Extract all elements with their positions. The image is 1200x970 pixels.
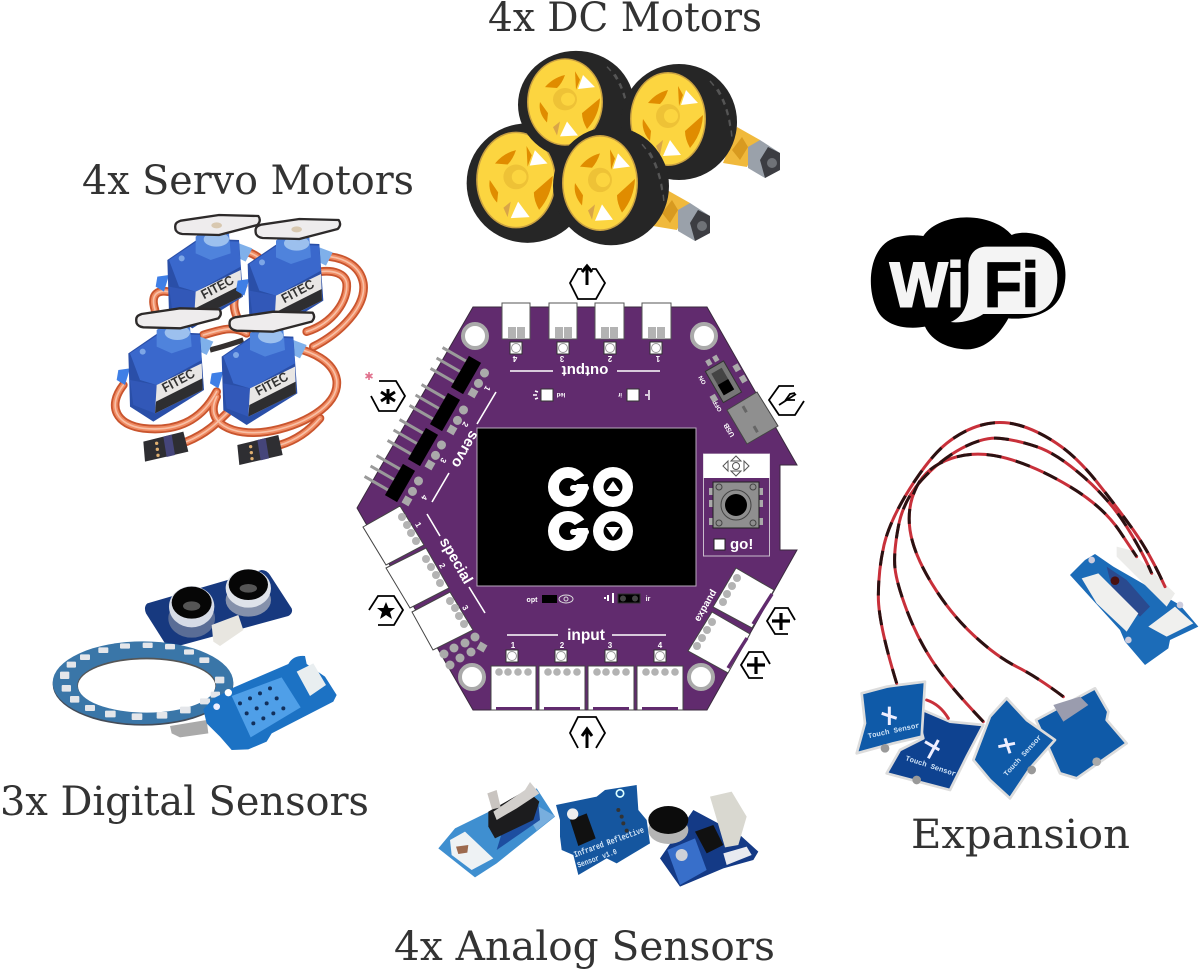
ultrasonic sensor (145, 569, 292, 647)
touch board 2 (887, 707, 983, 790)
wheel: front left (467, 123, 588, 243)
title: Expansion: Expansion (911, 812, 1130, 858)
wheel: front right (553, 127, 669, 245)
on off switch: ON (698, 374, 708, 385)
icon: usb hex (769, 386, 804, 415)
icon: input arrow hex (570, 717, 605, 748)
usb port (723, 392, 778, 444)
motor: front gearbox (653, 190, 710, 241)
special connectors (363, 506, 473, 650)
icon: expand plus hex bottom (741, 652, 770, 678)
WiFi word: Fi (984, 251, 1039, 321)
icon: WiFi logo (871, 217, 1065, 349)
GoGo logo (554, 467, 633, 551)
touch board details: Touch Sensor (867, 722, 921, 741)
usb port: USB (723, 422, 736, 438)
output connectors (502, 303, 671, 363)
illustration: three digital sensors (53, 569, 337, 750)
input connectors (491, 641, 683, 710)
WiFi word (890, 251, 1039, 321)
opt jumper (527, 595, 573, 604)
infrared reflective module: Infrared Reflective (573, 825, 646, 860)
title: 3x Digital Sensors: 3x Digital Sensors (0, 779, 369, 825)
special label (413, 514, 485, 613)
input connectors: 3 (608, 641, 613, 650)
microswitch module (438, 782, 555, 877)
output label: output (562, 362, 608, 379)
servo: back left (156, 215, 260, 328)
special label: 1 (413, 521, 423, 529)
opt jumper: opt (527, 597, 538, 604)
servo horn screws (211, 222, 302, 232)
servo: back right (236, 219, 340, 332)
infrared reflective module (556, 785, 650, 875)
joystick panel (704, 454, 770, 556)
touch board details (867, 697, 1101, 784)
touch board 1 (857, 682, 925, 753)
output connectors: 2 (607, 354, 612, 363)
panel: GoGo board (357, 303, 797, 710)
special label: 3 (460, 604, 470, 612)
servo label: 1 (482, 384, 492, 393)
servo label: 4 (419, 493, 429, 502)
on off switch (693, 348, 754, 412)
touch board 3 (973, 698, 1055, 798)
ir jumper (604, 593, 651, 603)
input label: input (567, 627, 605, 644)
board outline (357, 307, 797, 710)
push button (709, 482, 763, 528)
icon: servo asterisk hex (371, 381, 405, 411)
icon: expand plus hex top (767, 608, 795, 634)
illustration: four servo motors (115, 215, 364, 465)
output connectors: 3 (559, 354, 564, 363)
special label: 2 (437, 562, 447, 570)
mounting holes (460, 324, 716, 689)
touch board details: Touch Sensor (1003, 734, 1044, 779)
servo cables (115, 252, 364, 445)
WiFi word: Wi (890, 251, 964, 321)
on off switch: OFF (712, 399, 724, 412)
led and ir indicators: led (556, 391, 565, 397)
servo: front left (117, 308, 221, 422)
title: 4x Analog Sensors: 4x Analog Sensors (394, 924, 775, 970)
temperature and humidity sensor (203, 656, 337, 750)
icon: output arrow hex (570, 266, 605, 299)
icon: special star hex (369, 596, 403, 625)
servo: front right (210, 312, 314, 425)
touch board details: Touch Sensor (904, 755, 957, 779)
servo plug: right (237, 435, 283, 465)
title: 4x Servo Motors: 4x Servo Motors (82, 158, 414, 204)
illustration: expansion touch sensors with cables (857, 422, 1198, 798)
output connectors: 1 (655, 354, 660, 363)
infrared reflective module: Sensor v1.0 (576, 848, 619, 870)
icon: pink asterisk (366, 372, 372, 380)
motor: right gearbox (723, 127, 780, 178)
right board with connectors (1070, 547, 1198, 665)
illustration: four analog sensors (438, 782, 758, 887)
LED ring (53, 641, 233, 737)
servo label: 2 (460, 420, 470, 429)
servo label: servo (448, 428, 482, 471)
wheel: back right (621, 64, 737, 180)
go button label: go! (730, 536, 753, 553)
servo label: 3 (438, 456, 448, 465)
servo label (419, 384, 496, 502)
cables dark (878, 422, 1165, 722)
wheel: back left (518, 51, 634, 159)
output connectors: 4 (512, 354, 517, 363)
illustration: four DC motors with wheels (467, 51, 780, 245)
expand connectors: expand (692, 588, 719, 624)
led and ir indicators: ir (617, 391, 622, 397)
input connectors: 4 (658, 641, 663, 650)
special label: special (436, 534, 476, 587)
screen (477, 428, 696, 586)
led and ir indicators (533, 389, 649, 401)
grey pad cluster (440, 632, 487, 670)
sound sensor module (648, 792, 758, 887)
direction arrows (723, 456, 749, 476)
servo headers (362, 342, 492, 508)
input connectors: 2 (560, 641, 565, 650)
ir jumper: ir (646, 596, 651, 603)
servo plug: left (143, 432, 188, 462)
cables red (878, 422, 1165, 722)
touch board 4 (1036, 688, 1127, 778)
expand connectors (688, 568, 774, 673)
input connectors: 1 (511, 641, 516, 650)
